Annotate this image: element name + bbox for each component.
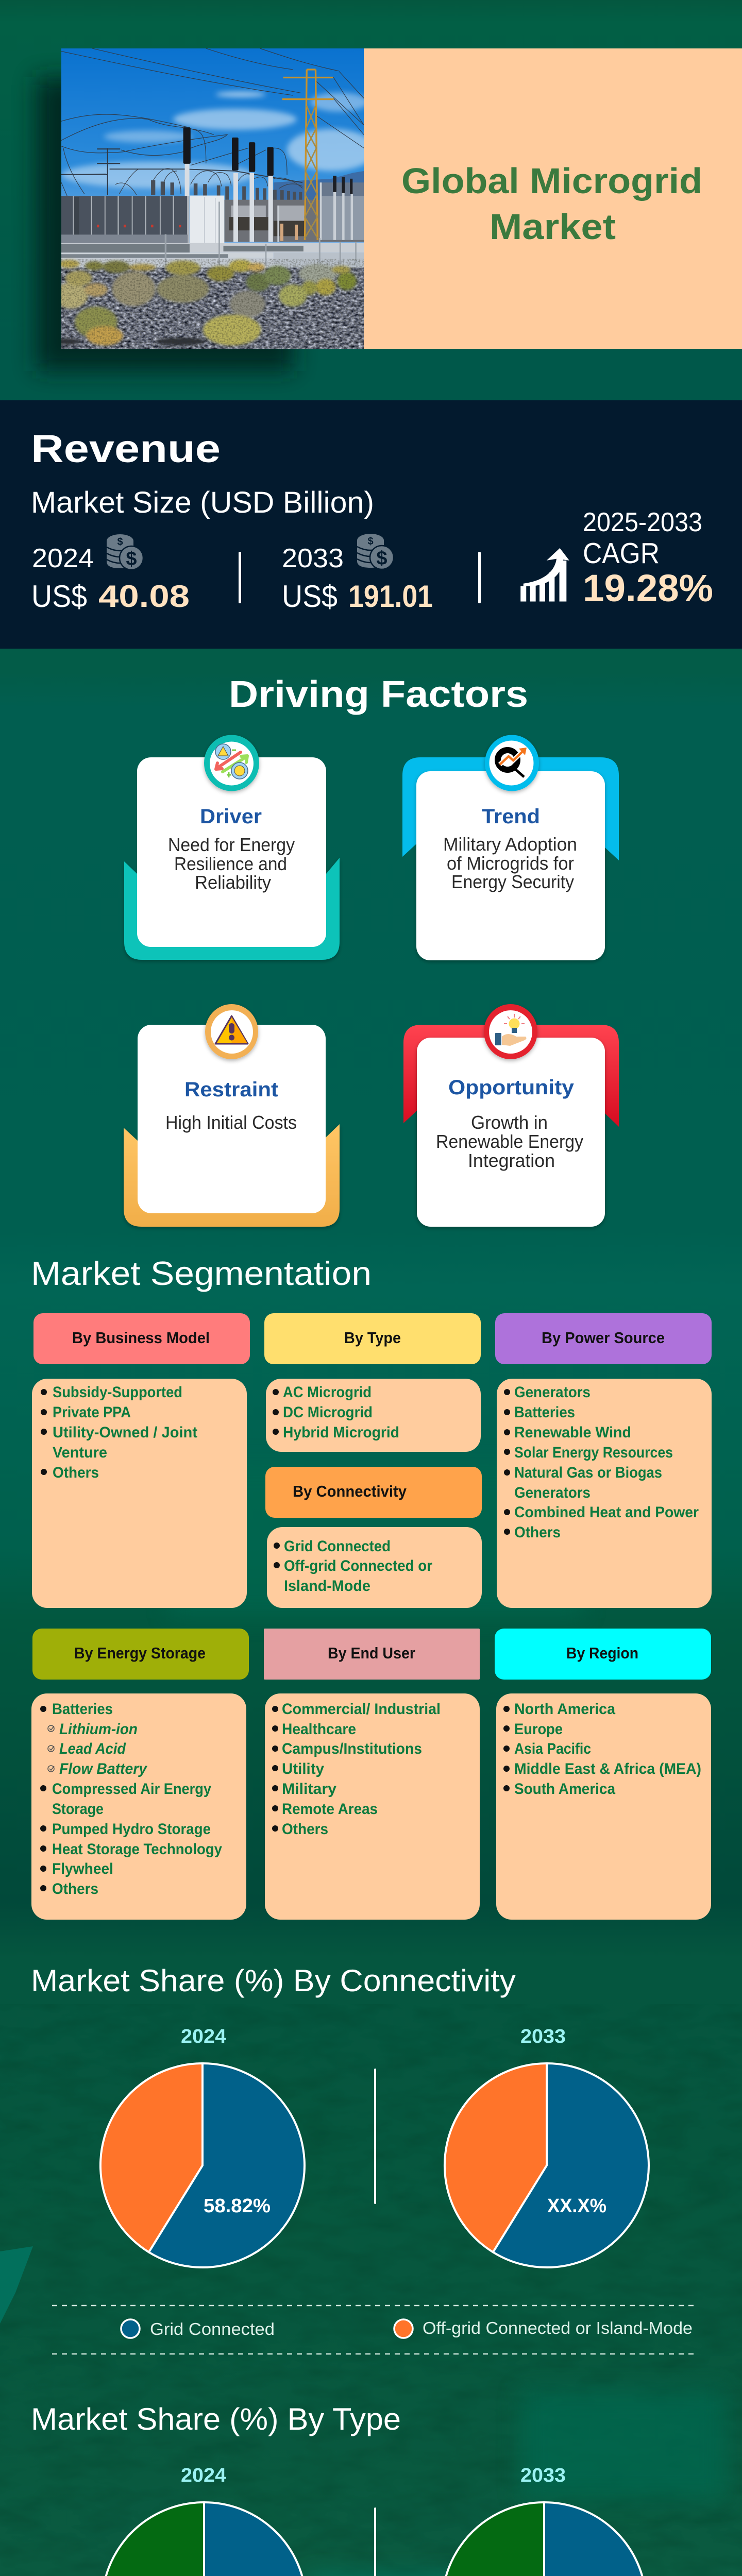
- title panel: [364, 48, 742, 349]
- segment: by type: [264, 1313, 481, 1452]
- market size label: Market Size (USD Billion): [31, 486, 374, 519]
- 2033 value: [282, 544, 433, 614]
- segment: by energy storage: Pumped Hydro Storage: [52, 1821, 211, 1838]
- segment: by energy storage: Flywheel: [52, 1860, 113, 1877]
- legend: connectivity: Grid Connected: [150, 2319, 275, 2338]
- icon: driver: [204, 735, 259, 791]
- 2024 value: 40.08: [98, 579, 190, 614]
- segment: by connectivity: Off-grid Connected or: [284, 1557, 432, 1574]
- driver text: Resilience and: [174, 853, 287, 874]
- segment: by business model: Venture: [53, 1444, 107, 1461]
- segment: by energy storage: By Energy Storage: [74, 1644, 206, 1662]
- segment: by power source: Solar Energy Resources: [514, 1444, 673, 1461]
- segment: by connectivity: Grid Connected: [284, 1538, 391, 1555]
- segment: by type: By Type: [344, 1329, 401, 1347]
- segment: by region: Middle East & Africa (MEA): [514, 1760, 701, 1777]
- icon: growth arrow: [520, 548, 569, 602]
- CAGR value: 2025-2033: [583, 507, 702, 537]
- segment: by type: DC Microgrid: [283, 1404, 373, 1421]
- opportunity text: [436, 1112, 583, 1171]
- pie chart: connectivity 2024: 58.82%: [204, 2195, 271, 2217]
- 2024 value: US$: [31, 579, 87, 614]
- icon: restraint: [205, 1004, 258, 1059]
- segment: by type: AC Microgrid: [283, 1384, 372, 1401]
- icon: coins 2024: $: [117, 536, 123, 548]
- card: opportunity: Opportunity: [448, 1076, 575, 1099]
- 2024 value: 2024: [32, 544, 94, 573]
- segment: by energy storage: Batteries: [52, 1701, 113, 1718]
- restraint text: High Initial Costs: [165, 1112, 297, 1133]
- icon: coins 2033: $: [376, 548, 387, 569]
- 2024 value: [31, 544, 190, 614]
- 2033 value: 2033: [282, 544, 344, 573]
- pie chart: type 2024: 2024: [181, 2465, 226, 2486]
- segment: by power source: Generators: [514, 1484, 591, 1501]
- trend text: [443, 834, 577, 892]
- header shadow: [36, 77, 294, 371]
- segment: by energy storage: Others: [52, 1880, 98, 1897]
- segment: by energy storage: Storage: [52, 1801, 104, 1818]
- segment: by energy storage: Compressed Air Energy: [52, 1781, 211, 1798]
- title: [401, 161, 702, 247]
- pie chart: connectivity 2033: XX.X%: [547, 2195, 606, 2217]
- segment: by end user: By End User: [328, 1644, 415, 1662]
- icon: coins 2024: [107, 534, 143, 570]
- icon: coins 2033: [357, 534, 394, 569]
- segment: by power source: Combined Heat and Power: [514, 1504, 699, 1521]
- segment: by power source: Renewable Wind: [514, 1424, 631, 1441]
- segment: by region: [495, 1629, 711, 1920]
- heading: market share by type: Market Share (%) By Type: [31, 2402, 401, 2436]
- driver text: Need for Energy: [168, 834, 295, 855]
- card: trend: [402, 735, 619, 960]
- icon: opportunity: [484, 1004, 537, 1059]
- legend: connectivity: [52, 2306, 695, 2354]
- segment: by business model: Others: [53, 1464, 99, 1481]
- segment: by connectivity: [265, 1467, 482, 1608]
- CAGR value: 19.28%: [583, 567, 713, 609]
- trend text: of Microgrids for: [447, 853, 574, 874]
- card: driver: [124, 735, 340, 960]
- segment: by end user: Others: [282, 1821, 328, 1838]
- segment: by end user: [264, 1629, 480, 1920]
- opportunity text: Growth in: [471, 1112, 548, 1133]
- pie chart: type 2033: 2033: [520, 2465, 566, 2486]
- trend text: Military Adoption: [443, 834, 577, 855]
- icon: trend: [485, 735, 539, 791]
- segment: by type: Hybrid Microgrid: [283, 1424, 399, 1441]
- segment: by end user: Military: [282, 1781, 336, 1798]
- segment: by energy storage: Lithium-ion: [59, 1721, 138, 1738]
- segment: by end user: Healthcare: [282, 1721, 356, 1738]
- heading: market share by connectivity: Market Share (%) By Connectivity: [31, 1963, 516, 1998]
- CAGR value: CAGR: [583, 537, 660, 570]
- segment: by end user: Commercial/ Industrial: [282, 1701, 441, 1718]
- title: Market: [490, 207, 616, 247]
- CAGR value: [583, 507, 713, 609]
- segment: by region: North America: [514, 1701, 615, 1718]
- segment: by end user: Campus/Institutions: [282, 1740, 422, 1757]
- segment: by region: Europe: [514, 1721, 563, 1738]
- market segmentation heading: Market Segmentation: [31, 1255, 372, 1292]
- trend text: Energy Security: [451, 871, 574, 892]
- segment: by power source: Batteries: [514, 1404, 575, 1421]
- revenue heading: Revenue: [31, 427, 221, 471]
- segment: by business model: Utility-Owned / Joint: [53, 1424, 197, 1441]
- pie chart: connectivity 2033: 2033: [520, 2026, 566, 2047]
- segment: by energy storage: Heat Storage Technology: [52, 1841, 222, 1858]
- segment: by connectivity: By Connectivity: [293, 1482, 407, 1500]
- pie chart: type 2024: [102, 2465, 306, 2576]
- card: opportunity: [403, 1004, 619, 1227]
- icon: coins 2033: $: [367, 536, 374, 547]
- pie chart: connectivity 2024: [100, 2026, 305, 2267]
- segment: by region: By Region: [566, 1644, 638, 1662]
- segment: by energy storage: [31, 1629, 249, 1920]
- pie chart: connectivity 2033: [445, 2026, 649, 2267]
- revenue panel: [0, 400, 742, 649]
- card: driver: Driver: [200, 805, 262, 828]
- segment: by energy storage: Lead Acid: [59, 1740, 126, 1757]
- segment: by power source: Natural Gas or Biogas: [514, 1464, 662, 1481]
- icon: coins 2024: $: [126, 548, 137, 570]
- segment: by region: Asia Pacific: [514, 1740, 591, 1757]
- 2033 value: 191.01: [348, 579, 433, 614]
- segment: by business model: Subsidy-Supported: [53, 1384, 182, 1401]
- segment: by business model: Private PPA: [53, 1404, 131, 1421]
- card: restraint: [124, 1004, 340, 1227]
- opportunity text: Renewable Energy: [436, 1131, 583, 1152]
- segment: by end user: Remote Areas: [282, 1801, 378, 1818]
- card: restraint: Restraint: [184, 1078, 278, 1101]
- segment: by region: South America: [514, 1781, 615, 1798]
- title: Global Microgrid: [401, 161, 702, 201]
- segment: by end user: Utility: [282, 1760, 324, 1777]
- segment: by connectivity: Island-Mode: [284, 1578, 370, 1595]
- segment: by power source: Generators: [514, 1384, 591, 1401]
- segment: by power source: [495, 1313, 712, 1608]
- segment: by business model: [32, 1313, 250, 1608]
- legend: connectivity: Off-grid Connected or Island-Mode: [423, 2318, 693, 2337]
- card: trend: Trend: [482, 805, 540, 828]
- driver text: Reliability: [195, 872, 271, 893]
- segment: by power source: By Power Source: [542, 1329, 665, 1347]
- 2033 value: US$: [282, 579, 338, 614]
- driving factors heading: Driving Factors: [229, 674, 528, 715]
- pie chart: type 2033: [442, 2465, 646, 2576]
- pie chart: connectivity 2024: 2024: [181, 2026, 226, 2047]
- opportunity text: Integration: [468, 1150, 555, 1171]
- segment: by business model: By Business Model: [72, 1329, 210, 1347]
- hero photo: substation in desert: [54, 48, 376, 350]
- segment: by power source: Others: [514, 1524, 561, 1541]
- driver text: [168, 834, 295, 893]
- segment: by energy storage: Flow Battery: [59, 1760, 147, 1777]
